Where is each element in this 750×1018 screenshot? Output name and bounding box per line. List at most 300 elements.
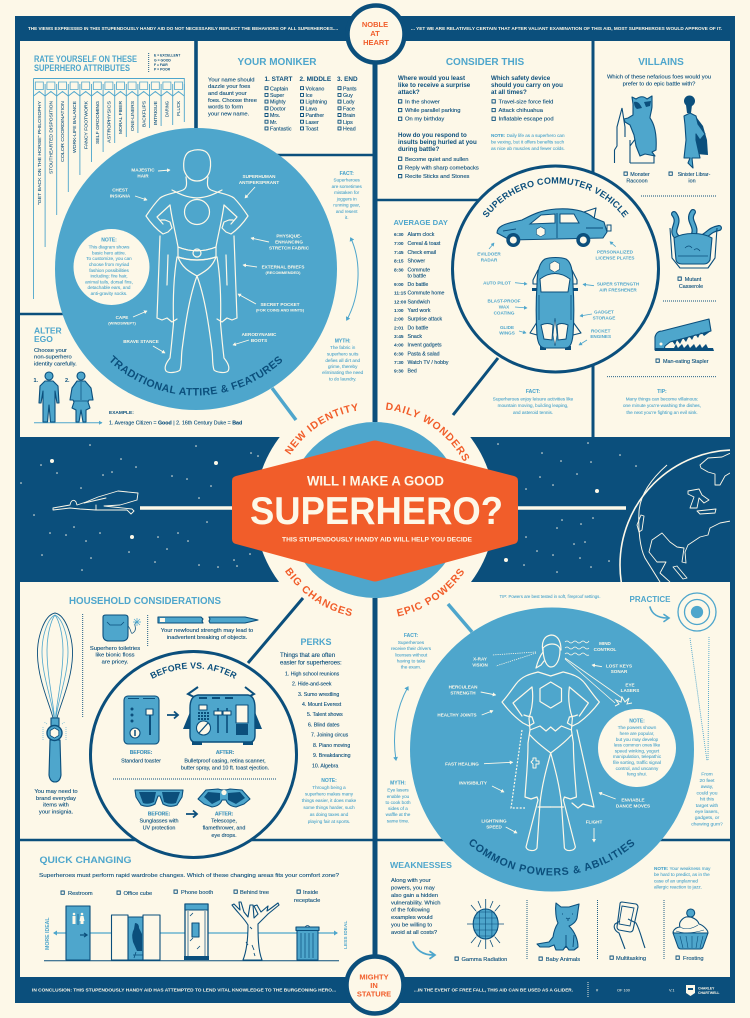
- weaknesses text: examples would: [391, 915, 433, 921]
- hero callout labels: EXTERNAL BRIEFS: [262, 264, 304, 270]
- target question: From: [701, 772, 713, 778]
- label: mutant casserole: Casserole: [679, 284, 703, 290]
- attribute names: "GET BACK ON THE HORSE" PHILOSOPHY: [37, 100, 43, 205]
- times: 7:45: [394, 250, 404, 256]
- target question: chewing gum?: [691, 822, 723, 828]
- icon: smartphone in hand: [614, 902, 645, 949]
- target question: 20 feet: [700, 778, 715, 784]
- attribute names: SELF GROOMING: [95, 101, 101, 144]
- icon: standard toaster: [124, 696, 159, 744]
- icon: monster raccoon on skyscraper: [614, 96, 656, 163]
- vehicle callout labels: WAX: [499, 304, 510, 310]
- fact: leisure activities: and asteroid tennis.: [513, 410, 553, 415]
- moniker columns: Super: [270, 93, 284, 99]
- hero callout labels: (WINDSWEPT): [108, 320, 136, 326]
- note: daily life: be vexing, but it offers benefits such: [491, 140, 565, 144]
- arrow: sunglasses upgrade: [186, 810, 197, 818]
- moniker columns: Panther: [306, 113, 324, 119]
- note circle: popular powers: here are popular,: [620, 731, 654, 736]
- note circle: popular powers: feng shui.: [627, 772, 647, 776]
- moniker columns: Fantastic: [270, 126, 292, 132]
- perks list: 7. Joining circus: [311, 733, 349, 739]
- arrow: fact to myth: [394, 687, 408, 760]
- hero callout arrows: [133, 170, 269, 353]
- badge: noble at heart: NOBLE: [362, 20, 388, 29]
- moniker columns: Captain: [270, 86, 288, 92]
- blue center disc: [287, 422, 463, 598]
- footer edition details and logo: CHARTWELL: [698, 991, 719, 995]
- answer options: Attack chihuahua: [498, 108, 544, 114]
- badge: noble at heart: AT: [370, 29, 380, 38]
- label: man-eating stapler: Man-eating Stapler: [663, 359, 709, 365]
- section label: epic powers: EPIC POWERS: [396, 568, 464, 616]
- question block: attack?: [398, 89, 420, 96]
- villain labels: raccoon and librarian: Raccoon: [626, 178, 648, 184]
- vehicle callout labels: STORAGE: [593, 316, 615, 321]
- activities: Shower: [408, 259, 425, 265]
- moniker columns: Toast: [306, 126, 319, 132]
- vehicle callout labels: COATING: [494, 310, 515, 316]
- weakness labels: Baby Animals: [546, 957, 580, 963]
- power callout arrows: [481, 665, 616, 842]
- section label: big changes: BIG CHANGES: [285, 567, 352, 616]
- moniker columns: Face: [343, 106, 355, 112]
- icon: restroom door: [66, 906, 90, 960]
- vehicle callout labels: ENGINES: [590, 334, 611, 339]
- changing options: Restroom: [68, 891, 93, 897]
- times: 9:30: [394, 369, 404, 375]
- changing options: Phone booth: [181, 890, 213, 896]
- arrow: to examples: [413, 942, 435, 958]
- note circle: popular powers: but you may develop: [616, 737, 659, 742]
- pencil caption: Your newfound strength may lead to: [161, 628, 253, 634]
- toaster captions: Bulletproof casing, retina scanner,: [184, 758, 266, 764]
- note circle: basic hero attire: anti-gravity socks.: [91, 291, 127, 296]
- vehicle callout labels: LICENSE PLATES: [596, 256, 634, 260]
- toaster captions: BEFORE:: [130, 750, 153, 756]
- tip: villainous things: one minute you're washing the dishes,: [623, 403, 701, 408]
- note circle: popular powers: [598, 709, 676, 787]
- hero callout labels: CHEST: [112, 188, 128, 192]
- heading: your moniker: YOUR MONIKER: [238, 56, 317, 68]
- icon: phone booth: [184, 904, 209, 960]
- flight lines: [140, 506, 626, 510]
- icon: weaponized toaster: [183, 687, 262, 745]
- activities: Pasta & salad: [408, 351, 440, 357]
- power callout labels: FLIGHT: [586, 820, 602, 824]
- activities: Commute: [408, 268, 430, 274]
- badge: mighty in stature: MIGHTY: [359, 972, 389, 982]
- villains intro: prefer to do epic battle with?: [623, 81, 696, 87]
- vehicle callout labels: BLAST-PROOF: [488, 298, 521, 304]
- moniker columns: [264, 76, 358, 132]
- perks list: 8. Piano moving: [313, 743, 350, 749]
- hero callout labels: ANTIPERSPIRANT: [239, 180, 279, 185]
- pencil caption: inadvertent breaking of objects.: [167, 635, 248, 641]
- myth: self-cleaning fabric: defies all dirt and: [325, 358, 361, 363]
- activities: Sandwich: [408, 299, 430, 305]
- power callout labels: SPEED: [486, 824, 502, 830]
- heading: alter ego: ALTER: [34, 326, 62, 336]
- bright stars: [50, 459, 599, 562]
- note: harder things: NOTE:: [321, 778, 337, 784]
- power callout labels: HERCULEAN: [449, 684, 478, 690]
- attribute names: WORK-LIFE BALANCE: [72, 101, 78, 153]
- activities: Cereal & toast: [408, 241, 441, 247]
- villain labels: raccoon and librarian: Sinister Librar-: [678, 172, 711, 178]
- quick changing intro: Superheroes must perform rapid wardrobe changes. Which of these changing areas fits your comfort zone?: [39, 873, 340, 879]
- title text: WILL I MAKE A GOOD: [307, 472, 444, 488]
- footer edition details and logo: #: [596, 988, 599, 992]
- note circle: basic hero attire: basic hero attire.: [92, 250, 126, 256]
- arrow: to target: [650, 607, 669, 622]
- note: daily life: as nice ab muscles and fewer colds.: [491, 146, 565, 151]
- question block: during battle?: [398, 146, 439, 153]
- badge: mighty in stature: IN: [370, 981, 378, 990]
- heading: household considerations: HOUSEHOLD CONSIDERATIONS: [69, 596, 221, 607]
- perks list: 2. Hide-and-seek: [292, 682, 332, 688]
- power callout labels: INVISIBILITY: [459, 780, 487, 786]
- toaster captions: butter spray, and 10 ft. toast ejection.: [181, 765, 269, 771]
- myth: eye lasers waffle: MYTH:: [390, 780, 406, 786]
- times: 9:00: [394, 282, 404, 288]
- panel: outer space band: [20, 437, 730, 582]
- myth: self-cleaning fabric: superhero suits: [327, 352, 359, 356]
- moniker intro: Your name should: [208, 77, 255, 83]
- power callout labels: MIND: [599, 641, 612, 646]
- curved title: before vs after: BEFORE VS. AFTER: [150, 662, 236, 679]
- weakness labels: Multitasking: [616, 956, 646, 962]
- sunglasses captions: BEFORE:: [148, 812, 171, 818]
- vehicle callout labels: ROCKET: [591, 328, 611, 333]
- times: 12:00: [394, 299, 407, 305]
- times: 2:01: [394, 325, 404, 331]
- vehicle callout labels: AIR FRESHENER: [599, 288, 637, 293]
- note circle: popular powers: file sorting, traffic signal: [613, 760, 661, 765]
- answer options: Recite Sticks and Stones: [405, 174, 470, 180]
- attribute names: STOUTHEARTED DISPOSITION: [49, 100, 55, 174]
- panel: practice target: [630, 593, 723, 828]
- moniker intro: and daunt your: [208, 91, 247, 97]
- fact: superheroes mistaken for joggers: FACT:: [340, 171, 354, 177]
- panel: consider this: [398, 57, 565, 180]
- answer checkboxes: [398, 100, 495, 178]
- activities: to battle: [408, 273, 426, 279]
- note circle: basic hero attire: fashion possibilities: [89, 268, 129, 273]
- icon: office cubicle: [112, 915, 160, 960]
- myth: eye lasers waffle: Eye lasers: [387, 788, 409, 792]
- fact: drivers licenses: receive their drivers: [391, 646, 432, 651]
- curved title: traditional attire and features: TRADITIONAL ATTIRE & FEATURES: [110, 355, 282, 396]
- note circle: basic hero attire: [74, 229, 150, 305]
- power callout labels: STRENGTH: [450, 690, 476, 696]
- footer band text: ...IN THE EVENT OF FREE FALL, THIS AID CAN BE USED AS A GLIDER.: [414, 988, 573, 992]
- note circle: popular powers: less common ones like: [614, 742, 661, 748]
- note: daily life: NOTE: Daily life as a superhero can: [491, 133, 565, 138]
- weaknesses text: vulnerability. Which: [391, 900, 441, 906]
- times: 11:15: [394, 291, 406, 297]
- attribute names: PLUCK: [176, 100, 182, 116]
- times: 4:00: [394, 343, 404, 349]
- center title badge: [232, 402, 518, 616]
- figure: male superhero outline: [146, 150, 248, 373]
- figure: average citizen: [39, 372, 59, 422]
- myth: eye lasers waffle: to cook both: [385, 800, 411, 805]
- sunglasses captions: eye drops.: [211, 833, 237, 839]
- perks list: 6. Blind dates: [308, 722, 340, 728]
- figure: female superhero outline: [502, 635, 599, 851]
- perks list: 5. Talent shows: [307, 712, 343, 718]
- curved title: common powers and abilities: COMMON POWERS & ABILITIES: [470, 839, 634, 876]
- sunglasses captions: Telescope,: [211, 819, 237, 825]
- title text: [250, 472, 503, 544]
- note circle: popular powers: speed winking, yogurt: [615, 748, 660, 754]
- attribute names: ONE-LINERS: [130, 101, 136, 131]
- vehicle callout labels: EVILDOER: [477, 252, 501, 256]
- note circle: basic hero attire: including: fire hair,: [90, 274, 128, 278]
- icon: baby kitten: [537, 903, 579, 950]
- footer edition details and logo: [588, 982, 719, 998]
- vehicle callout labels: AUTO PILOT: [483, 280, 511, 285]
- alter ego text: non-superhero: [34, 355, 72, 361]
- panel: before vs after circle: [89, 650, 298, 859]
- hero callout labels: INSIGNIA: [110, 194, 131, 198]
- activities: Watch TV / hobby: [408, 360, 449, 366]
- attribute names: DARING: [165, 101, 171, 117]
- fact: drivers licenses: FACT:: [404, 633, 418, 639]
- times: 7:30: [394, 360, 404, 366]
- power callout labels: LOST KEYS: [606, 664, 632, 668]
- hero callout labels: PHYSIQUE-: [276, 234, 302, 238]
- times: 1:00: [394, 308, 404, 314]
- badge: mighty in stature: [346, 956, 404, 1014]
- weaknesses text: powers, you may: [391, 885, 435, 891]
- fact: superheroes mistaken for joggers: running gear,: [333, 202, 360, 208]
- power callout labels: LASERS: [621, 688, 639, 693]
- note: weakness: NOTE: Your weakness may: [654, 866, 710, 871]
- changing options: receptacle: [294, 898, 320, 904]
- answer options: Reply with sharp comebacks: [405, 166, 479, 172]
- hero callout labels: BRAVE STANCE: [123, 339, 159, 344]
- panel: upper content area: [20, 41, 730, 437]
- moniker columns: Guy: [343, 93, 353, 99]
- times: 8:15: [394, 259, 404, 265]
- moniker columns: Head: [343, 126, 356, 132]
- times: 8:30: [394, 268, 404, 274]
- perks intro: easier for superheroes:: [280, 661, 342, 667]
- answer options: While parallel parking: [405, 108, 460, 114]
- note circle: basic hero attire: To customize, you can: [86, 256, 132, 261]
- section label: daily wonders: DAILY WONDERS: [386, 402, 470, 461]
- icon: frosted cupcake: [673, 909, 708, 949]
- section label: new identity: NEW IDENTITY: [284, 403, 358, 455]
- vehicle callout arrows: [489, 242, 616, 345]
- rating legend: F = FAIR: [154, 63, 168, 67]
- times: 7:00: [394, 241, 404, 247]
- panel: villains: [607, 57, 719, 415]
- floss caption: are pricey.: [102, 659, 129, 665]
- heading: perks: PERKS: [300, 637, 332, 647]
- fact: superheroes mistaken for joggers: Superheroes: [334, 178, 361, 182]
- changing options: Behind tree: [240, 890, 269, 896]
- heading: weaknesses: WEAKNESSES: [390, 860, 452, 870]
- alter ego text: Choose your: [34, 348, 67, 354]
- note circle: basic hero attire: choose from myriad: [89, 262, 130, 267]
- panel: perks: [280, 637, 357, 824]
- attribute names: ASTROPHYSICS: [107, 101, 113, 143]
- activities: Surprise attack: [408, 317, 443, 323]
- heading: villains: VILLAINS: [638, 57, 684, 68]
- attribute names: INTRIGUE: [153, 101, 159, 125]
- hero callout labels: BOOTS: [251, 338, 267, 343]
- figure: flying hero: [53, 491, 138, 514]
- power callout labels: LIGHTNING: [481, 818, 507, 824]
- arrow: fact to myth: [347, 238, 358, 320]
- icon: gamma radiation: [467, 899, 504, 949]
- whisk caption: You may need to: [34, 789, 78, 795]
- rating legend: [149, 53, 181, 72]
- activities: Snack: [408, 334, 422, 340]
- weaknesses text: of the following: [391, 908, 430, 914]
- perks list: 3. Sumo wrestling: [298, 692, 339, 698]
- question block: like to receive a surprise: [398, 82, 471, 89]
- weakness labels: Frosting: [683, 956, 704, 962]
- heading: average day: AVERAGE DAY: [394, 218, 448, 227]
- icon: target: [678, 593, 716, 631]
- moniker columns: Laser: [306, 120, 319, 126]
- answer options: Become quiet and sullen: [405, 157, 468, 163]
- question block: How do you respond to: [398, 132, 467, 139]
- question block: Where would you least: [398, 75, 465, 82]
- power callout labels: VISION: [472, 662, 488, 668]
- connector lines: [272, 388, 472, 632]
- moniker columns: Ice: [306, 93, 313, 99]
- footer edition details and logo: OF 100: [617, 988, 631, 992]
- stars: [21, 443, 639, 572]
- badge: noble at heart: [348, 6, 404, 62]
- activities: Do battle: [408, 282, 428, 288]
- label: mutant casserole: Mutant: [685, 277, 702, 283]
- header text band: [28, 26, 722, 31]
- activities: Check email: [408, 250, 436, 256]
- moniker columns: Brain: [343, 113, 355, 119]
- note circle: basic hero attire: NOTE:: [101, 238, 117, 244]
- power callout labels: EYE: [625, 682, 635, 688]
- tip: villainous things: the next you're fighting an evil sink.: [626, 410, 698, 415]
- power callout labels: X-RAY: [473, 656, 487, 662]
- header text band: ... YET WE ARE RELATIVELY CERTAIN THAT AFTER VALIANT EXAMINATION OF THIS AID, MOST SUPERHEROES WOULD APPROVE OF IT.: [411, 26, 722, 31]
- fact: superheroes mistaken for joggers: are sometimes: [332, 184, 362, 189]
- moniker columns: 3. END: [337, 76, 358, 83]
- target question: could you: [697, 790, 718, 796]
- activities: Commute home: [408, 291, 445, 297]
- icon: broken pencil: [158, 617, 258, 623]
- fact: leisure activities: mountain moving, building leaping,: [498, 403, 568, 408]
- myth: self-cleaning fabric: grime, thereby: [328, 364, 358, 369]
- label: mutant casserole: [678, 277, 703, 290]
- times: 6:30: [394, 351, 404, 357]
- dotted aim lines: [690, 637, 709, 761]
- icon: car top view: [530, 258, 581, 350]
- heading: quick changing: QUICK CHANGING: [40, 855, 132, 865]
- panel: common powers diagram: [410, 608, 694, 892]
- power callout labels: SONAR: [611, 669, 628, 674]
- rating legend: G = GOOD: [154, 58, 171, 62]
- moniker intro: foes. Choose three: [208, 98, 257, 104]
- myth: self-cleaning fabric: MYTH:: [335, 338, 351, 344]
- badge: noble at heart: HEART: [363, 38, 389, 47]
- heading: practice: PRACTICE: [630, 595, 671, 604]
- moniker columns: Doctor: [270, 106, 286, 112]
- tip: testing powers: TIP: Powers are best tested in soft, fireproof settings.: [499, 594, 601, 599]
- hero callout labels: AERODYNAMIC: [242, 332, 277, 337]
- badge: mighty in stature: STATURE: [357, 990, 391, 998]
- hero callout labels: SECRET POCKET: [260, 302, 300, 307]
- moniker columns: Lava: [306, 106, 317, 112]
- activities: Do battle: [408, 325, 428, 331]
- activities: Invent gadgets: [408, 343, 442, 349]
- note circle: basic hero attire: animal tails, dorsal fins,: [85, 280, 133, 284]
- fact: superheroes mistaken for joggers: mistaken for: [334, 190, 360, 195]
- footer edition details and logo: CHARLEY: [698, 986, 715, 990]
- vehicle callout labels: SUPER STRENGTH: [597, 282, 640, 287]
- panel: superhero commuter vehicle: [451, 164, 660, 374]
- target question: eye lasers,: [695, 809, 719, 815]
- note: harder things: as doing taxes and: [310, 812, 349, 817]
- perks list: 10. Algebra: [312, 763, 338, 769]
- panel: traditional attire diagram: [55, 128, 337, 410]
- sunglasses captions: flamethrower, and: [203, 826, 245, 832]
- villains intro: Which of these nefarious foes would you: [607, 74, 711, 80]
- toaster captions: AFTER:: [216, 750, 234, 756]
- moniker intro: your new name.: [208, 111, 250, 117]
- hero callout labels: STRETCH FABRIC: [269, 246, 310, 250]
- changing options: Office cube: [124, 891, 152, 897]
- title text: THIS STUPENDOUSLY HANDY AID WILL HELP YOU DECIDE: [282, 536, 473, 544]
- moniker intro: words to form: [207, 105, 243, 111]
- answer options: Travel-size force field: [498, 99, 553, 105]
- panel: alter ego: [34, 326, 242, 426]
- note: harder things: some things harder, such: [303, 805, 355, 810]
- icon: branded whisk: [37, 613, 73, 782]
- icon: mutant casserole: [670, 212, 719, 268]
- icon: planet earth with North America: [619, 449, 730, 582]
- note: harder things: superhero makes many: [305, 792, 354, 796]
- perks list: 9. Breakdancing: [313, 753, 351, 759]
- question block: at all times?: [491, 89, 527, 96]
- question block: insults being hurled at you: [398, 139, 477, 146]
- panel: weaknesses: [390, 860, 711, 963]
- icon: bionic floss: [103, 615, 141, 641]
- moniker columns: Mr.: [270, 120, 277, 126]
- moniker intro: dazzle your foes: [208, 84, 250, 90]
- villain labels: raccoon and librarian: [624, 172, 711, 184]
- fact: leisure activities: Superheroes enjoy leisure activities like: [493, 396, 574, 401]
- target question: target with: [696, 803, 719, 809]
- myth: eye lasers waffle: sides of a: [388, 806, 408, 811]
- activities: Alarm clock: [408, 232, 435, 238]
- weaknesses text: you be willing to: [391, 923, 432, 929]
- panel: rate yourself attributes: [34, 53, 184, 299]
- villain labels: raccoon and librarian: ion: [688, 178, 696, 184]
- sunglasses captions: AFTER:: [215, 811, 233, 817]
- weaknesses text: Along with your: [391, 878, 431, 884]
- weakness labels: [455, 956, 704, 963]
- moniker columns: Mighty: [270, 100, 286, 106]
- sunglasses captions: Sunglasses with: [140, 819, 178, 825]
- weaknesses text: also gain a hidden: [391, 893, 438, 899]
- tip: villainous things: Many things can become villainous:: [626, 396, 698, 401]
